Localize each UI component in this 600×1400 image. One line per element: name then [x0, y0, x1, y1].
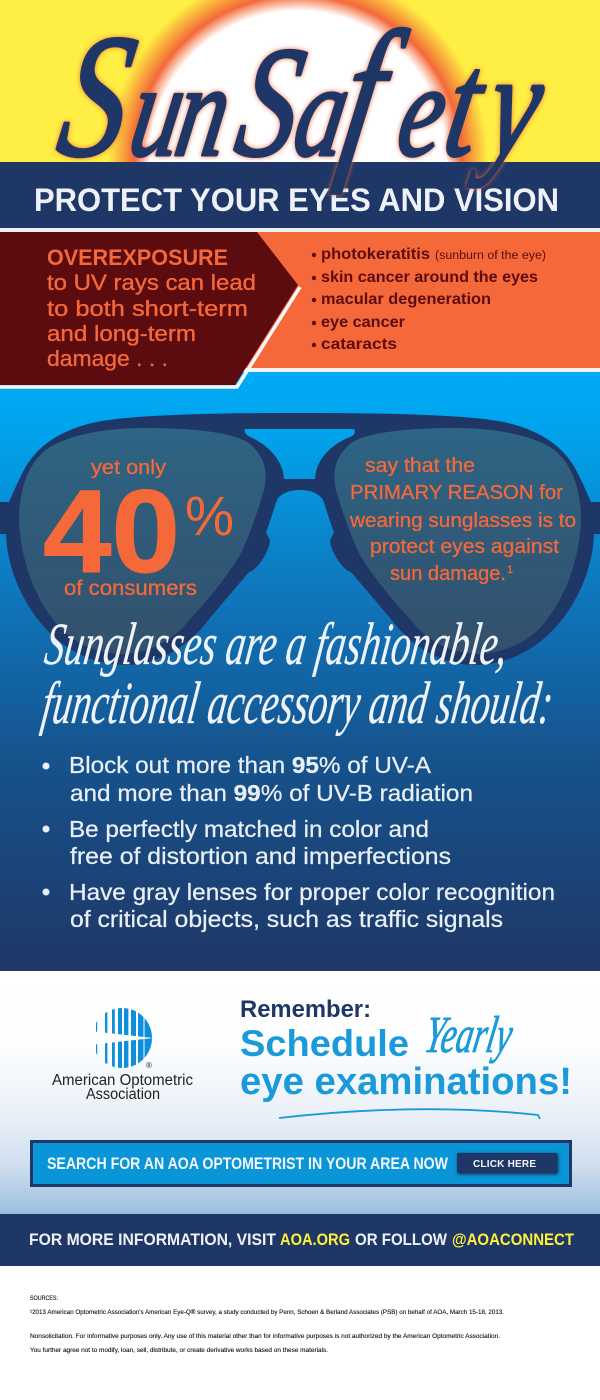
40 number: 40 — [43, 466, 180, 598]
sunglasses guidance list: and more than 99% of UV-B radiation — [70, 780, 473, 806]
reminder message: eye examinations! — [240, 1061, 572, 1103]
footer band: AOA.ORG — [280, 1231, 350, 1249]
underline swoosh — [279, 1109, 540, 1119]
right lens statement: protect eyes against — [370, 536, 559, 558]
script heading — [38, 611, 557, 737]
subtitle: PROTECT YOUR EYES AND VISION — [34, 182, 559, 218]
AOA logo: Association — [86, 1086, 160, 1103]
left lens statistic: of consumers — [64, 577, 197, 600]
sunglasses guidance list: of critical objects, such as traffic signals — [70, 906, 503, 932]
AOA logo — [52, 1008, 193, 1103]
right lens statement: wearing sunglasses is to — [349, 510, 576, 532]
footer band: OR FOLLOW — [355, 1231, 447, 1249]
icon: striped eye disc — [96, 1008, 152, 1068]
conditions list: photokeratitis — [321, 246, 430, 263]
right lens — [334, 428, 581, 654]
overexposure text: to both short-term — [47, 296, 248, 321]
sunglasses guidance list — [43, 752, 555, 932]
conditions list: macular degeneration — [321, 291, 491, 308]
header band — [0, 162, 600, 232]
blue main background — [0, 372, 600, 971]
conditions list: (sunburn of the eye) — [435, 250, 546, 262]
panel: conditions list background — [0, 232, 600, 368]
header: sun background — [0, 0, 600, 163]
overexposure section — [0, 232, 600, 971]
title: Sun Safety — [47, 0, 561, 194]
right lens statement: say that the — [365, 455, 475, 477]
reminder message: Schedule — [240, 1023, 409, 1064]
conditions list: cataracts — [321, 336, 397, 353]
pale lower panel — [0, 971, 600, 1214]
right lens statement — [349, 455, 576, 585]
panel: overexposure arrow — [0, 232, 298, 385]
reminder message: Remember: — [240, 996, 371, 1023]
right lens statement: PRIMARY REASON for — [350, 482, 563, 504]
left lens statistic: yet only — [91, 457, 166, 479]
overexposure text: and long-term — [47, 321, 196, 346]
sources and disclaimer: SOURCES: — [30, 1295, 58, 1302]
search banner: SEARCH FOR AN AOA OPTOMETRIST IN YOUR AREA NOW — [47, 1155, 448, 1173]
button: click here: CLICK HERE — [473, 1159, 536, 1170]
percent sign: % — [185, 484, 234, 547]
search banner — [32, 1142, 570, 1186]
sunglasses guidance list: Block out more than 95% of UV-A — [69, 752, 432, 778]
button: click here — [457, 1153, 557, 1173]
footer band: FOR MORE INFORMATION, VISIT — [29, 1231, 276, 1249]
right lens statement: sun damage. — [390, 563, 506, 585]
right lens statement: 1 — [507, 564, 513, 576]
AOA logo: American Optometric — [52, 1072, 193, 1089]
reminder message — [240, 996, 572, 1119]
overexposure text — [47, 245, 256, 371]
footer band — [0, 1214, 600, 1266]
sources and disclaimer: ¹2013 American Optometric Association's American Eye-Q® survey, a study conducted by Penn, Schoen & Berland Associates (PSB) on behalf of AOA, March 15-18, 2013. — [30, 1308, 504, 1316]
conditions list: eye cancer — [321, 314, 405, 331]
conditions list — [312, 246, 546, 353]
overexposure text: OVEREXPOSURE — [47, 245, 228, 270]
left lens statistic — [43, 457, 234, 600]
reminder message: Yearly — [421, 1006, 518, 1064]
left lens — [19, 428, 266, 654]
overexposure text: to UV rays can lead — [47, 270, 256, 295]
AOA logo: ® — [146, 1061, 152, 1070]
sources and disclaimer — [30, 1295, 504, 1354]
sources and disclaimer: Nonsolicitation. For informative purposes only. Any use of this material other than for informative purposes is not authorized by the American Optometric Association. — [30, 1333, 500, 1340]
frame — [0, 413, 600, 665]
conditions list: skin cancer around the eyes — [321, 269, 538, 286]
footer band: @AOACONNECT — [452, 1231, 574, 1249]
sunglasses — [0, 413, 600, 665]
sunglasses guidance list: Be perfectly matched in color and — [69, 816, 429, 842]
sunglasses guidance list: Have gray lenses for proper color recognition — [69, 879, 555, 905]
sources and disclaimer: You further agree not to modify, loan, sell, distribute, or create derivative works based on these materials. — [30, 1347, 328, 1354]
arrow white edge — [0, 287, 300, 387]
sunglasses guidance list: free of distortion and imperfections — [70, 843, 451, 869]
overexposure text: damage . . . — [47, 346, 168, 371]
